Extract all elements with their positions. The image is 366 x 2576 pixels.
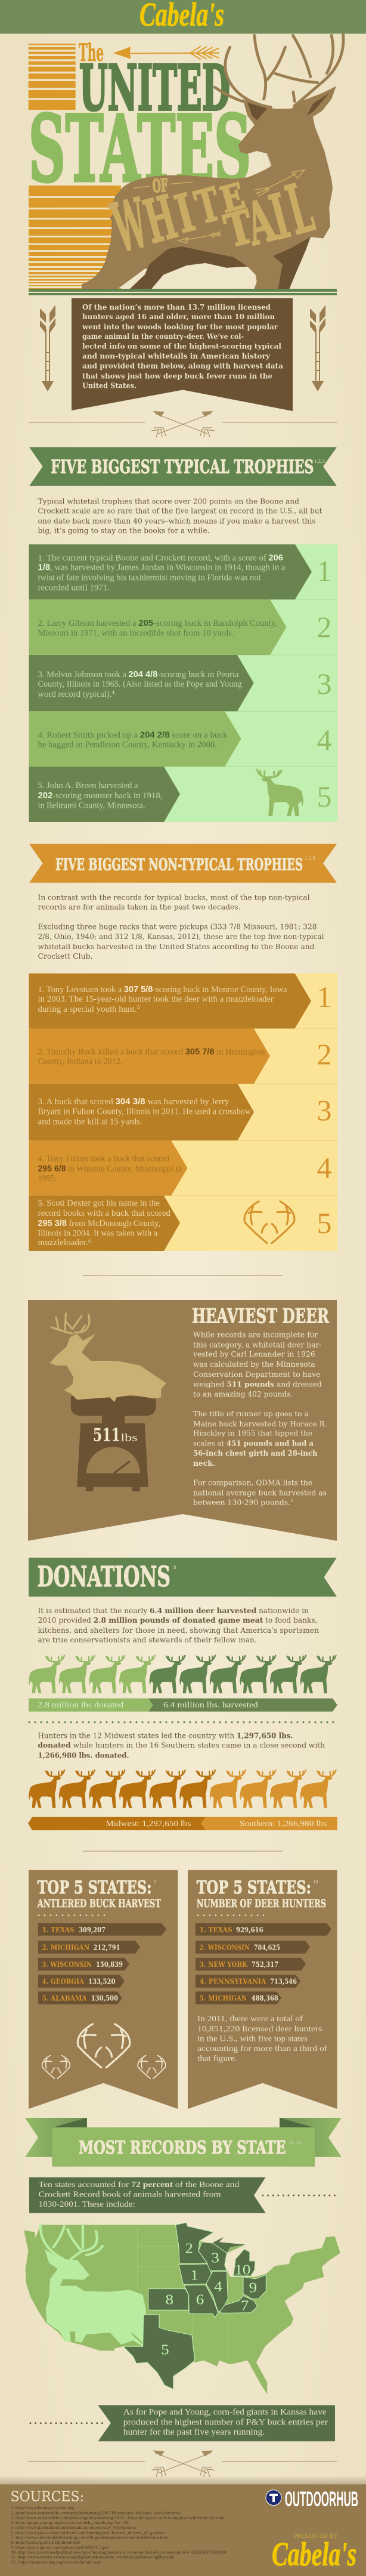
text: donations intro: kitchens, and shelters for those in need, showing that America’s sportsmen xyxy=(38,1626,319,1635)
text: typical intro: Crockett scale are so rare that of the five largest on record in the U.S., all but xyxy=(38,507,322,515)
row 1: during a special youth hunt. xyxy=(38,1005,137,1014)
row 1: 1 xyxy=(317,554,331,588)
row 2: 2 xyxy=(317,610,331,644)
pictogram: midwest vs south xyxy=(29,1770,336,1808)
list: states: 150,839 xyxy=(96,1960,123,1969)
text: midwest vs south xyxy=(38,1732,325,1760)
banner: most records by state xyxy=(25,2118,342,2167)
row 3: 3 xyxy=(317,1094,331,1127)
text: heaviest deer body: weighed 511 pounds and dressed xyxy=(193,1379,322,1389)
text: heaviest deer body: neck. xyxy=(193,1459,215,1468)
state: Kansas, 8: 8 xyxy=(165,2291,173,2308)
deer illustration xyxy=(82,34,343,291)
text: hunters note: In 2011, there were a total of xyxy=(197,2015,303,2024)
text: hunters note: that figure. xyxy=(197,2054,237,2063)
text: typical intro xyxy=(38,498,322,535)
callout: pope and young: produced the highest number of P&Y buck entries per xyxy=(123,2417,328,2427)
row 4: 4. Tony Fulton took a buck that scored xyxy=(38,1154,170,1163)
list: sources: 1. http://www.boone-crockett.org xyxy=(11,2505,74,2510)
scale readout: 511 lbs: 511 xyxy=(93,1425,120,1445)
divider line xyxy=(83,1275,283,1276)
text: typical intro: big, it’s going to stay on the books for a while. xyxy=(38,527,210,535)
icon: deer on scale: lbs xyxy=(120,1432,138,1443)
list: non-typical trophies xyxy=(29,974,337,1251)
text: non-typical intro: 2/8, Ohio, 1940; and 312 1/8, Kansas, 2012), these are the top five non-typical xyxy=(38,932,324,941)
deer lettering: WHITE xyxy=(105,175,249,268)
title block with deer xyxy=(29,34,343,295)
deer lettering: WHITE: H xyxy=(138,183,184,257)
icon: deer on scale xyxy=(49,1314,166,1491)
state: Ohio, 9 xyxy=(243,2275,266,2299)
row 1: 5 xyxy=(137,1005,139,1010)
panel: intro text: United States. xyxy=(82,381,137,390)
text: non-typical intro xyxy=(38,893,324,960)
bar: midwest vs south: Southern: 1,266,980 lbs xyxy=(240,1819,327,1828)
deer lettering: WHITE: I xyxy=(169,183,201,245)
panel: intro text: hunters aged 16 and older, more than 10 million xyxy=(82,313,275,321)
row 4 xyxy=(29,711,331,767)
state: Iowa, 1 xyxy=(179,2264,213,2284)
list: sources: 2. http://www.outdoorlife.com/articles/hunting/2007/09/outdoor-life-book-world-records xyxy=(11,2510,180,2515)
map outline xyxy=(24,2223,340,2394)
list: states: 5. MICHIGAN xyxy=(200,1994,247,2003)
row 2 xyxy=(29,600,331,655)
text: donations intro: 2010 provided 2.8 million pounds of donated game meat to food banks, xyxy=(38,1616,317,1624)
state: Kentucky, 7: 7 xyxy=(241,2297,249,2314)
row 1: 1. Tony Lovstuen took a 307 5/8-scoring buck in Monroe County, Iowa xyxy=(38,985,287,994)
row 3: 3 xyxy=(317,667,331,700)
bar: donated vs harvested: 2.8 million lbs donated xyxy=(38,1700,124,1709)
list: states: 5. ALABAMA xyxy=(42,1994,87,2003)
list: states: 1. TEXAS xyxy=(42,1925,74,1934)
state: Michigan, 10: 10 xyxy=(234,2261,250,2278)
row 4: 4 xyxy=(317,1151,331,1184)
state: Minnesota, 2: 2 xyxy=(185,2240,193,2256)
panel: antlered buck harvest xyxy=(29,1870,178,2109)
list: states: 309,207 xyxy=(79,1925,106,1934)
deer lettering: TAIL xyxy=(219,168,321,259)
state: Illinois, 4: 4 xyxy=(214,2278,222,2294)
text: midwest vs south: Hunters in the 12 Midwest states led the country with 1,297,650 lbs. xyxy=(38,1732,293,1740)
list: states: 3. NEW YORK xyxy=(200,1960,248,1969)
row 1: 1. The current typical Boone and Crockett record, with a score of 206 xyxy=(38,554,283,563)
row 3: 3. Melvin Johnson took a 204 4/8-scoring buck in Peoria xyxy=(38,670,239,679)
text: hunters note: accounting for more than a third of xyxy=(197,2044,327,2053)
row 5 xyxy=(29,767,331,822)
banner: five biggest typical trophies xyxy=(29,447,337,486)
deer lettering: WHITE: W xyxy=(105,183,155,268)
heading: UNITED: UNITED xyxy=(79,51,230,125)
heading: TOP 5 STATES: xyxy=(197,1877,311,1898)
list: typical trophies xyxy=(29,544,337,822)
list: states: 3. WISCONSIN xyxy=(42,1960,92,1969)
deer lettering: OF: OF xyxy=(152,174,168,196)
text: heaviest deer body: 8 xyxy=(291,1499,293,1503)
orange stripes bottom xyxy=(29,186,121,289)
text: midwest vs south: 1,266,980 lbs. donated. xyxy=(38,1752,129,1760)
row 5: in Beltrami County, Minnesota. xyxy=(38,801,145,810)
row 5: 6 xyxy=(88,1239,91,1244)
row 2: 2 xyxy=(317,1037,331,1071)
deer on map xyxy=(41,2225,146,2346)
header band with logo xyxy=(0,0,366,33)
row 3: and made the kill at 15 yards. xyxy=(38,1117,142,1126)
state: Minnesota, 2 xyxy=(176,2223,214,2263)
deer lettering: TAIL: A xyxy=(239,186,282,259)
row 5: 5. John A. Breen harvested a xyxy=(38,781,138,790)
panel: heaviest deer xyxy=(28,1300,337,1541)
banner: donations xyxy=(29,1558,337,1596)
state: Wisconsin, 3 xyxy=(198,2237,246,2271)
row 3: Bryant in Fulton County, Illinois in 2011. He used a crossbow xyxy=(38,1107,252,1116)
double rule xyxy=(29,289,337,295)
list: states: 212,791 xyxy=(94,1943,120,1952)
callout: ten states xyxy=(29,2177,266,2213)
icon: arrow left xyxy=(40,305,55,391)
deer lettering: TAIL: T xyxy=(219,199,259,258)
list: states: 4. PENNSYLVANIA xyxy=(200,1976,266,1985)
text: heaviest deer body: national average buck harvested as xyxy=(193,1488,327,1497)
deer lettering: WHITE: T xyxy=(190,177,225,234)
banner: five biggest non-typical trophies xyxy=(29,844,337,883)
icon: deer xyxy=(257,770,303,816)
banner: donations: 8 xyxy=(173,1565,176,1570)
row 4: he bagged in Pendleton County, Kentucky in 2000. xyxy=(38,740,217,749)
panel: intro text: lected info on some of the highest-scoring typical xyxy=(82,342,281,350)
deer lettering: WHITE: E xyxy=(216,175,249,221)
banner: donations: DONATIONS xyxy=(38,1560,170,1593)
list: sources: 8. http://nssf.org/2013/HuntersFeed/ xyxy=(11,2540,81,2545)
list: sources: 3. http://www.outdoorlife.com/photos/gallery/hunting/2011/11/top-40-typical-and-nontypical-whitetails-all-time xyxy=(11,2515,225,2521)
list: sources: 12. https://pope-young.org/records/default.asp xyxy=(11,2559,101,2565)
panel: antlered buck harvest: 9 xyxy=(154,1880,156,1885)
divider line xyxy=(83,1851,283,1852)
state: Michigan, 10 xyxy=(233,2249,255,2278)
callout: pope and young: As for Pope and Young, corn-fed giants in Kansas have xyxy=(123,2408,327,2417)
arrow: title xyxy=(113,46,219,60)
text: heaviest deer body: scales at 451 pounds and had a xyxy=(193,1439,314,1448)
row 4 xyxy=(29,1141,331,1196)
text: donations intro xyxy=(38,1607,319,1644)
text: non-typical intro: records are for animals taken in the past two decades. xyxy=(38,903,241,912)
banner: most records by state: 11, 12 xyxy=(289,2141,301,2145)
list: states: 713,546 xyxy=(270,1976,297,1985)
bar: donated vs harvested xyxy=(29,1698,337,1712)
callout: ten states: 1830-2001. These include: xyxy=(39,2200,135,2209)
bar: midwest vs south: Midwest: 1,297,650 lbs xyxy=(106,1819,191,1828)
panel: intro text: that shows just how deep buck fever runs in the xyxy=(82,372,272,381)
row 1: in 2003. The 15-year-old hunter took the deer with a muzzleloader xyxy=(38,994,274,1004)
list: states: 752,317 xyxy=(252,1960,278,1969)
icon: arrow right xyxy=(310,305,325,391)
list: states: 4. GEORGIA xyxy=(42,1976,84,1985)
heading: sources: SOURCES: xyxy=(11,2489,84,2505)
row 2: Missouri in 1971, with an incredible shot from 10 yards. xyxy=(38,629,234,638)
list: sources: 5. http://www.northamericanwhitetail.com/news/naw_0104promo/ xyxy=(11,2525,137,2530)
orange stripes top xyxy=(29,44,76,110)
panel: intro text: Of the nation’s more than 13.7 million licensed xyxy=(82,303,271,311)
state: Kansas, 8 xyxy=(148,2289,188,2310)
state: Illinois, 4 xyxy=(206,2271,228,2312)
callout: ten states: Ten states accounted for 72 percent of the Boone and xyxy=(39,2180,239,2189)
row 3: word record typical). xyxy=(38,690,112,699)
state: Wisconsin, 3: 3 xyxy=(211,2249,219,2266)
row 5: 295 3/8 from McDonough County, xyxy=(38,1219,160,1228)
state: Texas, 5: 5 xyxy=(161,2342,169,2358)
text: non-typical intro: whitetail bucks harvested in the United States according to the Boone and xyxy=(38,943,315,951)
row 3: 3. A buck that scored 304 3/8 was harvested by Jerry xyxy=(38,1097,229,1107)
row 5 xyxy=(29,1196,331,1251)
bar: midwest vs south xyxy=(28,1817,337,1830)
list: states: 2. MICHIGAN xyxy=(42,1943,89,1952)
pictogram: donated vs harvested xyxy=(29,1655,336,1693)
row 2: 2. Timothy Beck killed a buck that scored 305 7/8 in Huntington xyxy=(38,1047,265,1057)
divider: crossed arrows xyxy=(29,411,337,437)
row 5: record books with a buck that scored xyxy=(38,1209,171,1218)
text: midwest vs south: donated while hunters in the 16 Southern states came in a close second with xyxy=(38,1741,325,1750)
text: typical intro: Typical whitetail trophies that score over 200 points on the Boone and xyxy=(38,498,299,506)
list: states xyxy=(196,1923,331,2004)
text: heaviest deer body: Conservation Department to have xyxy=(193,1370,320,1379)
row 5: muzzleloader. xyxy=(38,1238,88,1247)
list: states: 2. WISCONSIN xyxy=(200,1943,250,1952)
list: states xyxy=(38,1923,166,2004)
row 5: 202-scoring monster back in 1918, xyxy=(38,791,162,801)
text: heaviest deer body: to an amazing 402 pounds. xyxy=(193,1389,293,1398)
row 4: 1995. xyxy=(38,1173,57,1183)
row 3 xyxy=(29,655,331,711)
bar: donated vs harvested: 6.4 million lbs. harvested xyxy=(163,1700,258,1709)
text: typical intro: one date back more than 40 years–which means if you make a harvest this xyxy=(38,517,316,526)
banner: five biggest non-typical trophies: 1,2,3 xyxy=(305,856,315,861)
list: sources: 11. http://www.boone-crockett.org/bgRecords/records_whitetail.asp?area=bgRecords xyxy=(11,2555,174,2560)
text: heaviest deer body: vested by Carl Lenander in 1926 xyxy=(193,1349,315,1358)
callout: pope and young: hunter for the past five years running. xyxy=(123,2427,265,2437)
text: heaviest deer body xyxy=(193,1330,327,1507)
text: heaviest deer body: was calculated by the Minnesota xyxy=(193,1360,315,1369)
list: states: 488,368 xyxy=(252,1994,278,2003)
row 5: 5 xyxy=(317,780,331,813)
row 2: County, Indiana in 2012. xyxy=(38,1057,123,1066)
text: hunters note: 10,851,220 licensed deer hunters xyxy=(197,2025,322,2034)
row 5: 5. Scott Dexter got his name in the xyxy=(38,1199,160,1208)
text: heaviest deer body: While records are incomplete for xyxy=(193,1330,318,1339)
row 1 xyxy=(29,974,331,1028)
list: sources: 10. http://issuu.com/nssfpublications/docs/huntinginamerica_economicforceforconservation?e=2322682/1501938 xyxy=(11,2549,227,2555)
row 2 xyxy=(29,1028,331,1084)
text: heaviest deer body: this category, a whitetail deer har- xyxy=(193,1340,322,1349)
panel: intro text: game animal in the country–deer. We’ve col- xyxy=(82,332,244,341)
row 1 xyxy=(29,544,331,600)
text: donations intro: are true conservationists and stewards of their fellow man. xyxy=(38,1636,257,1644)
title block with deer: The xyxy=(79,39,104,67)
row 1: 1 xyxy=(317,980,331,1014)
panel: intro text: and non-typical whitetails in American history xyxy=(82,352,271,360)
list: states: 1. TEXAS xyxy=(200,1925,232,1934)
list: states: 784,625 xyxy=(254,1943,280,1952)
divider: crossed arrows xyxy=(29,2451,337,2477)
row 2: 2. Larry Gibson harvested a 205-scoring buck in Randolph County, xyxy=(38,619,277,628)
state: Missouri, 6: 6 xyxy=(196,2291,204,2308)
map: records by state xyxy=(24,2223,340,2394)
list: sources: 9. https://www.qdma.com/uploads/pdf/WR2013.pdf xyxy=(11,2544,110,2550)
row 5: 5 xyxy=(317,1206,331,1240)
deer lettering: TAIL: I xyxy=(263,180,296,254)
text: non-typical intro: In contrast with the records for typical bucks, most of the top non-typical xyxy=(38,893,310,901)
list: states: 133,520 xyxy=(88,1976,116,1985)
icon: antlers xyxy=(244,1201,294,1243)
row 1: recorded until 1971. xyxy=(38,583,110,593)
list: sources xyxy=(11,2505,227,2565)
row 3: 4 xyxy=(112,690,115,695)
row 4: 4 xyxy=(317,723,331,756)
banner: most records by state: MOST RECORDS BY STATE xyxy=(79,2138,286,2158)
text: heaviest deer body: 56-inch chest girth and 28-inch xyxy=(193,1448,318,1457)
text: heaviest deer body: between 130-290 pounds. xyxy=(193,1498,290,1507)
text: heaviest deer body: Hinckley in 1955 that tipped the xyxy=(193,1429,312,1438)
state: Kentucky, 7 xyxy=(219,2296,258,2314)
panel: intro text xyxy=(72,298,293,411)
list: sources: 6. http://www.prairiestateoutdoors.com/hunting/article/scott_dexters_47_pointer xyxy=(11,2529,165,2535)
text: hunters note xyxy=(197,2015,327,2063)
callout: pope and young xyxy=(98,2405,335,2441)
panel: number of deer hunters: 10 xyxy=(313,1880,318,1885)
state: Ohio, 9: 9 xyxy=(249,2279,257,2296)
text: heaviest deer body: For comparison, QDMA lists the xyxy=(193,1478,312,1487)
callout: ten states: Crockett Record book of animals harvested from xyxy=(39,2191,221,2200)
footer xyxy=(0,2476,366,2576)
text: hunters note: in the U.S., with five top states xyxy=(197,2034,308,2043)
state: Missouri, 6 xyxy=(184,2285,218,2318)
row 5: Illinois in 2004. It was taken with a xyxy=(38,1228,158,1238)
list: states: 130,500 xyxy=(91,1994,118,2003)
deer lettering: TAIL: L xyxy=(279,168,321,251)
row 1: 1/8, was harvested by James Jordan in Wisconsin in 1914, though in a xyxy=(38,563,286,573)
text: presented by: PRESENTED BY xyxy=(294,2533,338,2540)
state: Texas, 5 xyxy=(123,2315,195,2389)
row 3: County, Illinois in 1965. (Also listed as the Pope and Young xyxy=(38,679,242,689)
row 1: twist of fate involving his taxidermist moving to Florida was not xyxy=(38,573,261,583)
text: non-typical intro: Excluding three huge racks that were pickups (333 7/8 Missouri, 1981; 328 xyxy=(38,922,317,931)
text: non-typical intro: Crockett Club. xyxy=(38,952,93,960)
panel: number of deer hunters xyxy=(188,1870,337,2109)
text: donations intro: It is estimated that the nearly 6.4 million deer harvested nationwide in xyxy=(38,1607,309,1615)
list: states: 929,616 xyxy=(236,1925,263,1934)
banner: five biggest typical trophies: 1,2,3 xyxy=(314,459,325,464)
subheading: ANTLERED BUCK HARVEST xyxy=(37,1897,161,1910)
icon: antlers xyxy=(42,2024,166,2078)
list: sources: 4. https://pope-young.org/records/records_details.asp?wr=20 xyxy=(11,2520,129,2525)
row 3 xyxy=(29,1084,331,1141)
heading: TOP 5 STATES: xyxy=(38,1877,152,1898)
state: Iowa, 1: 1 xyxy=(190,2266,198,2283)
row 4: 4. Robert Smith picked up a 204 2/8 score on a buck xyxy=(38,730,228,740)
panel: intro text: went into the woods looking for the most popular xyxy=(82,323,278,331)
list: sources: 7. http://www.deeranddeerhunting.com/blogs/deer-pictures-real-slobberknockers xyxy=(11,2535,168,2540)
panel: intro text: and provided them below, along with harvest data xyxy=(82,362,283,370)
text: heaviest deer body: The title of runner up goes to a xyxy=(193,1409,309,1418)
deer arrows xyxy=(179,170,305,243)
text: heaviest deer body: Maine buck harvested by Horace R. xyxy=(193,1419,327,1428)
row 4: 295 6/8 in Winston County, Mississippi in xyxy=(38,1164,182,1173)
